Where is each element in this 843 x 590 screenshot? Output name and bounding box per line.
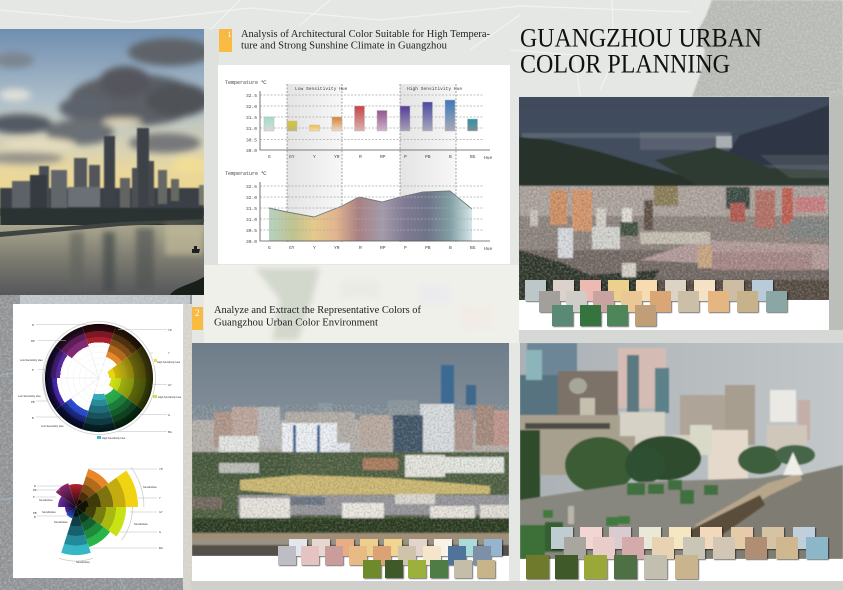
icon: section 2 marker	[192, 307, 203, 330]
chart: area chart of temperature by hue: 30.5	[246, 228, 257, 234]
chart: polar rose diagram: Sensitivities	[76, 560, 90, 564]
chart: polar rose diagram: YR	[159, 467, 163, 471]
chart: radial hue wheel: GY	[168, 383, 172, 387]
chart: area chart of temperature by hue: Y	[313, 245, 316, 251]
chart: polar rose diagram: Sensitivities	[54, 520, 68, 524]
chart: bar chart of temperature by hue: P	[404, 154, 407, 160]
chart: radial hue wheel: P	[32, 368, 34, 372]
chart: bar chart of temperature by hue	[225, 80, 493, 161]
chart: bar chart of temperature by hue: 31.5	[246, 115, 257, 121]
chart: area chart of temperature by hue: GY	[289, 245, 295, 251]
panel: hillside city photo with palette	[519, 97, 830, 330]
chart: polar rose diagram: P	[33, 495, 35, 499]
chart: radial hue wheel: Low Sensitivity Hue	[18, 394, 41, 398]
chart: polar rose diagram: Y	[159, 496, 161, 500]
chart: polar rose diagram: BG	[159, 546, 163, 550]
chart: radial hue wheel: High Sensitivity Hue	[157, 360, 181, 364]
chart: radial hue wheel: PB	[31, 400, 35, 404]
title: COLOR PLANNING	[520, 50, 730, 78]
chart: polar rose diagram: Sensitivities	[42, 510, 56, 514]
chart: bar chart of temperature by hue: 31.0	[246, 126, 257, 132]
chart: bar chart of temperature by hue: GY	[289, 154, 295, 160]
icon: section 1 marker: 1	[228, 30, 232, 39]
chart: area chart of temperature by hue: 32.5	[246, 184, 257, 190]
chart: area chart of temperature by hue: B	[449, 245, 452, 251]
chart: polar rose diagram: B	[34, 515, 36, 519]
icon: section 1 marker	[219, 29, 232, 52]
chart: radial hue wheel: High Sensitivity Hue	[158, 395, 182, 399]
chart: radial hue wheel: Low Sensitivity Hue	[20, 358, 43, 362]
heading: section 1: Analysis of Architectural Color Suitable for High Tempera-	[241, 28, 490, 40]
chart: bar chart of temperature by hue: YR	[334, 154, 340, 160]
chart: polar rose diagram: Sensitivities	[134, 522, 148, 526]
chart: bar chart of temperature by hue: 30.0	[246, 148, 257, 154]
chart: area chart of temperature by hue: 30.0	[246, 239, 257, 245]
chart: polar rose diagram: PB	[33, 511, 37, 515]
chart: radial hue wheel: G	[168, 413, 170, 417]
chart: radial hue wheel: RP	[31, 339, 35, 343]
heading: section 2: Guangzhou Urban Color Environment	[214, 316, 378, 328]
chart: area chart of temperature by hue: Temperature ℃	[225, 171, 267, 177]
panel: villas and skyline photo with palette	[192, 343, 509, 581]
chart: bar chart of temperature by hue: RP	[380, 154, 386, 160]
chart: bar chart of temperature by hue: Y	[313, 154, 316, 160]
chart: area chart of temperature by hue: PB	[425, 245, 431, 251]
title: GUANGZHOU URBAN	[520, 24, 762, 52]
chart: area chart of temperature by hue: P	[404, 245, 407, 251]
chart: bar chart of temperature by hue: Hue	[484, 155, 493, 161]
photo: hillside city	[519, 97, 830, 300]
chart: shaded sensitivity bands	[287, 84, 462, 242]
panel: color wheels	[13, 304, 183, 578]
icon: section 2 marker: 2	[195, 308, 200, 318]
palette: villas swatches	[278, 539, 502, 578]
chart: polar rose diagram: G	[159, 530, 161, 534]
chart: radial hue wheel: Low Sensitivity Hue	[41, 424, 64, 428]
chart: area chart of temperature by hue: 31.0	[246, 217, 257, 223]
chart: bar chart of temperature by hue: 30.5	[246, 138, 257, 144]
chart: shaded sensitivity bands: High Sensitivity Hue	[407, 86, 462, 92]
chart: polar rose diagram: GY	[159, 510, 163, 514]
heading: section 1: ture and Strong Sunshine Climate in Guangzhou	[241, 40, 448, 52]
panel: temperature charts	[218, 65, 510, 264]
palette: riverside swatches	[526, 527, 828, 579]
chart: area chart of temperature by hue: G	[268, 245, 271, 251]
chart: shaded sensitivity bands: Low Sensitivity Hue	[295, 86, 348, 92]
photo: riverside street	[520, 343, 843, 559]
chart: radial hue wheel	[18, 322, 182, 440]
chart: area chart of temperature by hue: 31.5	[246, 206, 257, 212]
chart: bar chart of temperature by hue: 32.0	[246, 104, 257, 110]
photo: villas and skyline	[192, 343, 509, 556]
panel: riverside street photo with palette	[520, 343, 843, 581]
chart: radial hue wheel: BG	[168, 430, 172, 434]
palette: hillside city swatches	[525, 280, 787, 326]
chart: polar rose diagram: R	[34, 484, 36, 488]
chart: polar rose diagram: Sensitivities	[143, 485, 157, 489]
chart: area chart of temperature by hue: Hue	[484, 246, 493, 252]
chart: radial hue wheel: Y	[168, 351, 170, 355]
chart: bar chart of temperature by hue: PB	[425, 154, 431, 160]
chart: area chart of temperature by hue: R	[359, 245, 362, 251]
chart: bar chart of temperature by hue: Temperature ℃	[225, 80, 267, 86]
chart: radial hue wheel: YR	[168, 328, 172, 332]
chart: polar rose diagram	[33, 466, 163, 564]
chart: area chart of temperature by hue: RP	[380, 245, 386, 251]
chart: polar rose diagram: RP	[33, 488, 37, 492]
chart: radial hue wheel: R	[32, 323, 34, 327]
chart: bar chart of temperature by hue: BG	[470, 154, 476, 160]
chart: bar chart of temperature by hue: R	[359, 154, 362, 160]
chart: radial hue wheel: B	[32, 416, 34, 420]
chart: radial hue wheel: High Sensitivity Hue	[102, 436, 126, 440]
chart: bar chart of temperature by hue: 32.5	[246, 93, 257, 99]
chart: bar chart of temperature by hue: B	[449, 154, 452, 160]
chart: area chart of temperature by hue: 32.0	[246, 195, 257, 201]
heading: section 2: Analyze and Extract the Representative Colors of	[214, 304, 421, 316]
chart: area chart of temperature by hue: BG	[470, 245, 476, 251]
chart: area chart of temperature by hue: YR	[334, 245, 340, 251]
chart: bar chart of temperature by hue: G	[268, 154, 271, 160]
chart: polar rose diagram: Sensitivities	[39, 498, 53, 502]
photo: Guangzhou skyline at dusk	[0, 29, 212, 295]
chart: area chart of temperature by hue	[225, 171, 493, 252]
